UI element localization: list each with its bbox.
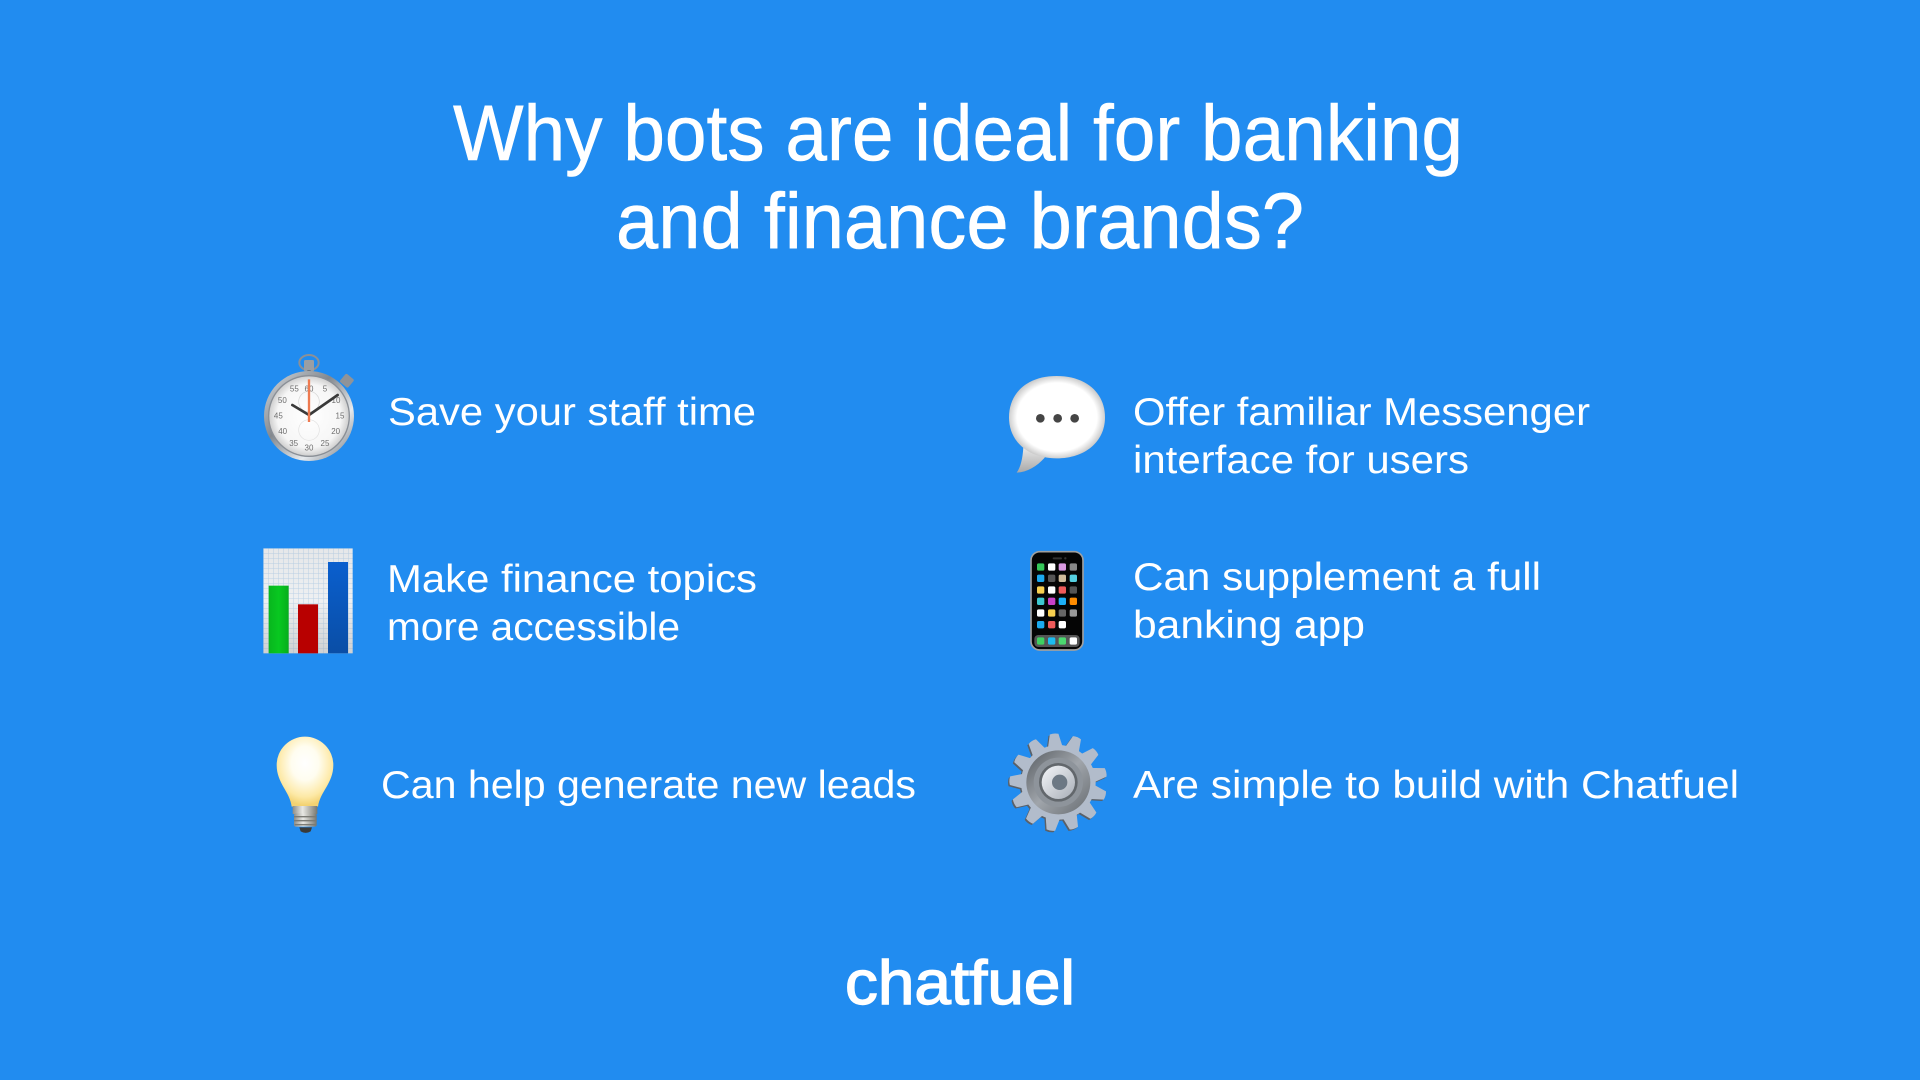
- label: [1133, 556, 1541, 647]
- label: Save your staff time: [388, 391, 756, 434]
- label: Offer familiar Messenger: [1133, 391, 1590, 434]
- label: interface for users: [1133, 439, 1469, 482]
- item: save staff time: [264, 355, 756, 461]
- icon: smartphone: [1031, 552, 1083, 650]
- icon: stopwatch: 45: [274, 412, 283, 421]
- icon: speech bubble: [1009, 376, 1105, 473]
- logo: chatfuel: chatfuel: [845, 949, 1075, 1018]
- label: Can help generate new leads: [381, 764, 916, 807]
- item: accessible finance topics: [263, 548, 757, 653]
- icon: stopwatch: 50: [278, 396, 287, 405]
- icon: stopwatch: 35: [289, 439, 299, 448]
- icon: light bulb: [277, 737, 333, 833]
- item: simple to build: [1008, 733, 1739, 833]
- icon: stopwatch: 15: [336, 412, 345, 421]
- icon: stopwatch: 25: [321, 439, 330, 448]
- label: banking app: [1133, 604, 1365, 647]
- icon: stopwatch: [264, 355, 354, 461]
- icon: stopwatch: 40: [278, 427, 288, 436]
- label: [387, 558, 757, 649]
- icon: stopwatch: 60: [305, 384, 314, 393]
- title: and finance brands?: [616, 176, 1304, 265]
- label: Can supplement a full: [1133, 556, 1541, 599]
- icon: stopwatch: 20: [331, 427, 341, 436]
- item: familiar messenger interface: [1009, 376, 1590, 482]
- icon: bar chart: [263, 548, 353, 653]
- label: [1133, 391, 1590, 482]
- icon: stopwatch: 10: [332, 396, 341, 405]
- label: Are simple to build with Chatfuel: [1133, 764, 1739, 807]
- title: [453, 88, 1463, 265]
- icon: stopwatch: 30: [305, 444, 314, 453]
- icon: gear: [1008, 733, 1108, 833]
- item: supplement banking app: [1031, 552, 1541, 650]
- item: generate leads: [277, 737, 916, 833]
- label: more accessible: [387, 606, 680, 649]
- icon: stopwatch: 5: [323, 384, 328, 393]
- label: Make finance topics: [387, 558, 757, 601]
- title: Why bots are ideal for banking: [453, 88, 1463, 177]
- icon: stopwatch: 55: [290, 384, 299, 393]
